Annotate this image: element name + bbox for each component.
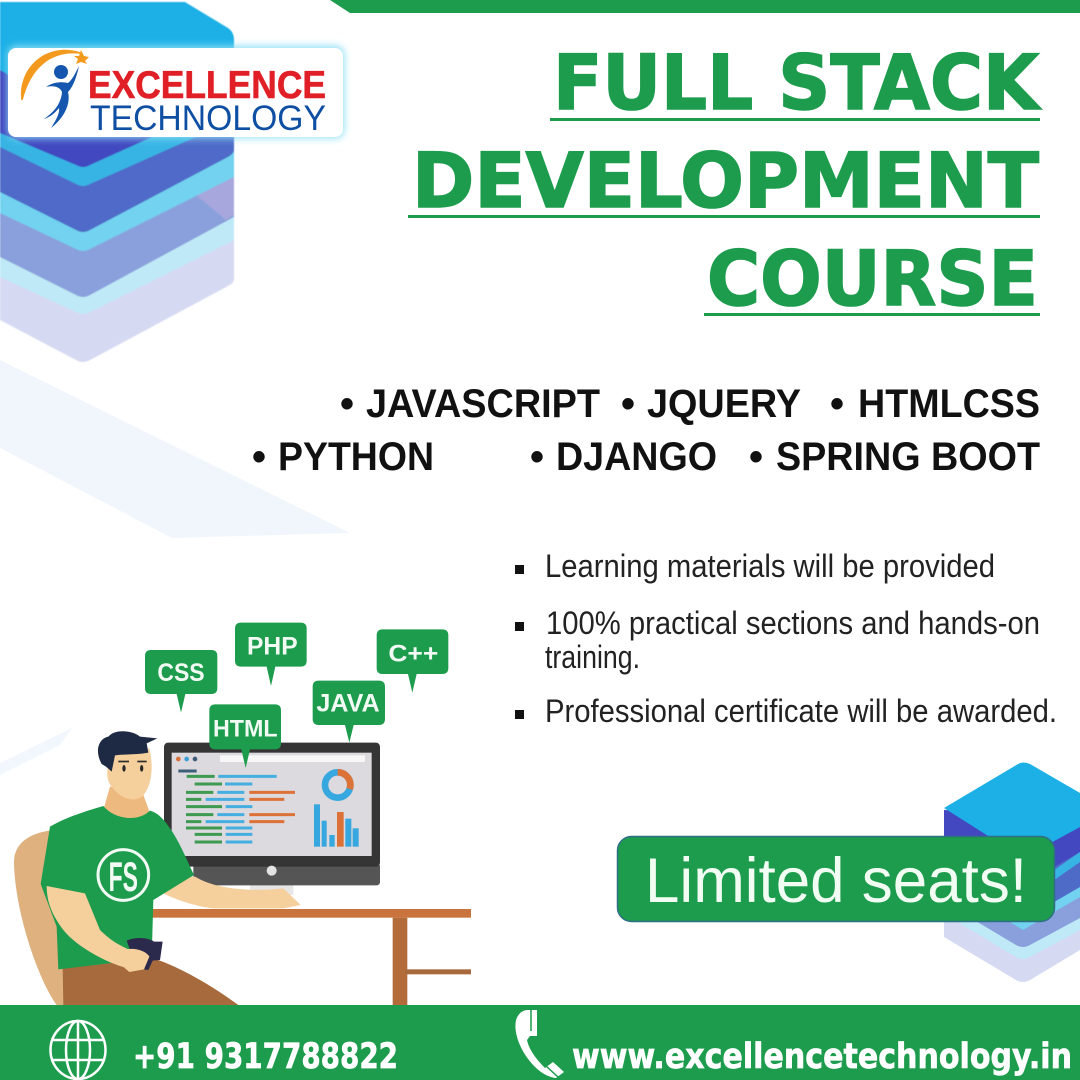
title: COURSE xyxy=(707,234,1038,323)
legs xyxy=(63,958,238,1005)
upper arm xyxy=(47,886,133,968)
phone number: +91 9317788822 xyxy=(133,1037,398,1077)
technology list xyxy=(252,382,1040,479)
bubble php: PHP xyxy=(247,632,298,660)
bubble java xyxy=(313,681,385,743)
forearm xyxy=(163,877,301,908)
feature bullet list: training. xyxy=(545,639,640,675)
head xyxy=(107,748,152,799)
coffee mug xyxy=(127,938,163,970)
code lines xyxy=(178,771,295,842)
shirt logo: FS xyxy=(109,854,138,900)
footer bar xyxy=(0,1005,1080,1080)
technology list: JQUERY xyxy=(647,382,801,426)
technology list: PYTHON xyxy=(278,435,434,479)
bubble java: JAVA xyxy=(316,690,380,718)
feature bullet list: Learning materials will be provided xyxy=(545,548,995,584)
donut chart xyxy=(325,772,350,798)
logo wordmark excellence: EXCELLENCE xyxy=(88,64,326,107)
bubble c++ xyxy=(377,629,448,693)
neck xyxy=(103,787,150,822)
eyes and smile xyxy=(118,761,147,772)
title underline 3 xyxy=(704,313,1040,316)
icon: globe xyxy=(50,1021,106,1079)
technology list: DJANGO xyxy=(556,435,717,479)
feature bullet list: 100% practical sections and hands-on xyxy=(546,605,1040,641)
feature bullet list xyxy=(515,548,1057,729)
logo wordmark technology: TECHNOLOGY xyxy=(90,99,326,138)
title underline 1 xyxy=(550,118,1040,121)
faint background sliver xyxy=(0,728,72,775)
bubble html xyxy=(209,704,281,768)
technology list: • xyxy=(530,435,544,479)
bubble html: HTML xyxy=(213,716,278,743)
logo swoosh xyxy=(22,51,80,100)
technology list: • xyxy=(749,435,763,479)
technology list: • xyxy=(340,382,354,426)
icon: telephone handset xyxy=(515,1010,564,1078)
bubble css xyxy=(145,650,217,713)
technology list: • xyxy=(621,382,635,426)
limited seats banner: Limited seats! xyxy=(645,846,1027,916)
logo panel xyxy=(8,46,344,138)
title xyxy=(412,38,1042,323)
title underline 2 xyxy=(408,215,1040,218)
logo star xyxy=(74,50,89,64)
t-shirt xyxy=(41,806,194,969)
browser dots xyxy=(176,755,365,762)
illustration: developer at desk xyxy=(14,623,471,1005)
bubble c++: C++ xyxy=(388,641,438,668)
faint background triangle xyxy=(0,360,350,538)
chair xyxy=(14,831,87,1005)
top green bar xyxy=(330,0,1080,13)
hair xyxy=(98,731,157,772)
technology list: SPRING BOOT xyxy=(776,435,1040,479)
bubble css: CSS xyxy=(157,659,205,687)
technology list: • xyxy=(830,382,844,426)
technology list: • xyxy=(252,435,266,479)
technology list: HTMLCSS xyxy=(858,382,1040,426)
bottom-right layered stack graphic xyxy=(944,762,1080,982)
title: DEVELOPMENT xyxy=(412,136,1039,225)
left layered stack graphic xyxy=(0,2,234,362)
title: FULL STACK xyxy=(553,38,1042,127)
bubble php xyxy=(235,623,307,686)
monitor xyxy=(164,743,380,895)
desk xyxy=(147,909,471,1005)
hand xyxy=(120,949,149,972)
bar chart xyxy=(314,804,359,847)
technology list: JAVASCRIPT xyxy=(366,382,600,426)
logo figure xyxy=(44,65,79,128)
shirt logo xyxy=(98,850,149,900)
